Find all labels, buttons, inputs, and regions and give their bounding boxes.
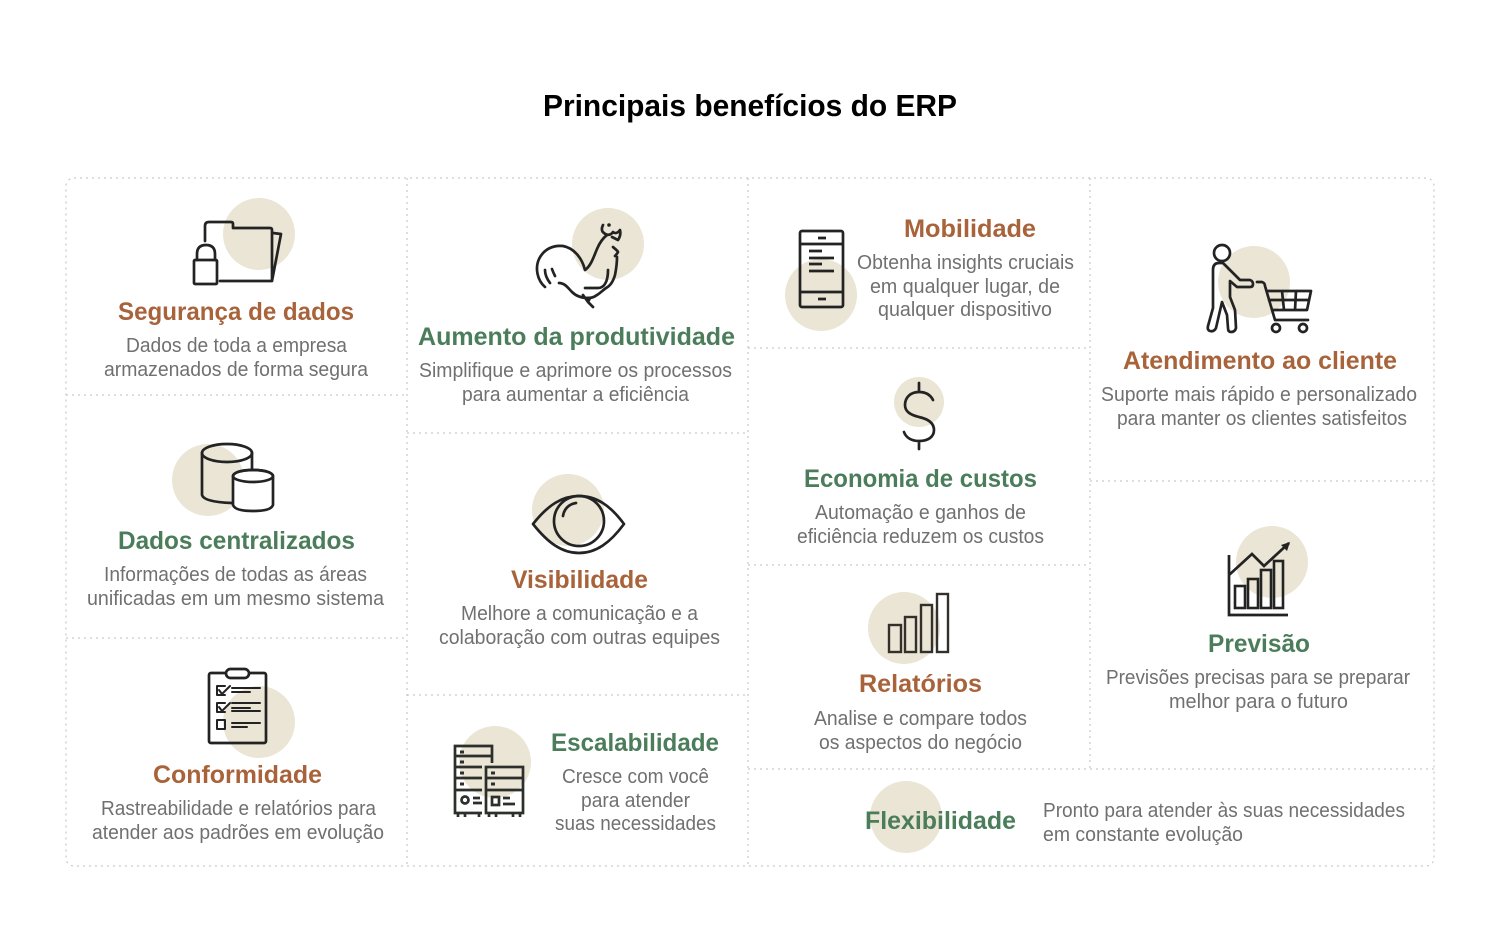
- description: [1106, 667, 1410, 713]
- description: [419, 360, 732, 406]
- description: [797, 502, 1044, 548]
- icon: dollar sign: [894, 377, 944, 449]
- description: Suporte mais rápido e personalizado: [1101, 384, 1417, 406]
- description: Simplifique e aprimore os processos: [419, 360, 732, 382]
- panel: Segurança de dados: [104, 198, 369, 381]
- heading: Visibilidade: [511, 566, 648, 594]
- description: [87, 564, 385, 610]
- icon: rooster: [537, 208, 644, 307]
- description: Pronto para atender às suas necessidades: [1043, 800, 1405, 822]
- heading: Conformidade: [153, 761, 322, 789]
- description: Previsões precisas para se preparar: [1106, 667, 1410, 689]
- description: [104, 335, 369, 381]
- description: Rastreabilidade e relatórios para: [101, 798, 377, 820]
- description: Automação e ganhos de: [815, 502, 1026, 524]
- description: Dados de toda a empresa: [126, 335, 348, 357]
- description: em qualquer lugar, de: [870, 276, 1060, 298]
- icon: beige circle: [870, 781, 942, 853]
- description: qualquer dispositivo: [878, 299, 1052, 321]
- description: Informações de todas as áreas: [104, 564, 367, 586]
- description: colaboração com outras equipes: [439, 627, 720, 649]
- description: para aumentar a eficiência: [462, 384, 690, 406]
- description: [1101, 384, 1417, 430]
- panel: Atendimento ao cliente: [1101, 245, 1417, 430]
- icon: database cylinders: [172, 444, 273, 516]
- heading: Previsão: [1208, 630, 1310, 658]
- heading: Aumento da produtividade: [418, 323, 735, 351]
- panel: Visibilidade: [439, 474, 720, 649]
- description: suas necessidades: [555, 813, 716, 835]
- description: atender aos padrões em evolução: [92, 822, 384, 844]
- panel: Escalabilidade: [455, 726, 719, 835]
- heading: Relatórios: [859, 670, 982, 698]
- description: melhor para o futuro: [1169, 691, 1348, 713]
- panel: Conformidade: [92, 669, 384, 844]
- panel: Previsão: [1106, 526, 1410, 713]
- heading: Segurança de dados: [118, 298, 354, 326]
- heading: Flexibilidade: [865, 807, 1016, 835]
- description: para manter os clientes satisfeitos: [1117, 408, 1407, 430]
- panel: Aumento da produtividade: [418, 208, 735, 406]
- description: unificadas em um mesmo sistema: [87, 588, 385, 610]
- description: em constante evolução: [1043, 824, 1243, 846]
- heading: Economia de custos: [804, 465, 1037, 493]
- description: [92, 798, 384, 844]
- description: [1043, 800, 1405, 846]
- icon: clipboard checklist: [209, 669, 295, 758]
- description: eficiência reduzem os custos: [797, 526, 1044, 548]
- description: Analise e compare todos: [814, 708, 1027, 730]
- panel: Flexibilidade: [865, 781, 1405, 853]
- icon: growth chart with arrow: [1229, 526, 1308, 615]
- icon: bar chart: [868, 592, 948, 664]
- panel: Dados centralizados: [87, 444, 385, 610]
- description: [439, 603, 720, 649]
- description: [814, 708, 1027, 754]
- heading: Escalabilidade: [551, 729, 719, 757]
- icon: eye: [532, 474, 624, 553]
- description: os aspectos do negócio: [819, 732, 1022, 754]
- heading: Dados centralizados: [118, 527, 355, 555]
- description: para atender: [581, 790, 690, 812]
- description: [857, 252, 1074, 321]
- heading: Mobilidade: [904, 215, 1036, 243]
- panel: Mobilidade: [785, 215, 1074, 331]
- description: Obtenha insights cruciais: [857, 252, 1074, 274]
- description: [555, 766, 716, 835]
- description: Cresce com você: [562, 766, 709, 788]
- icon: person with shopping cart: [1208, 245, 1311, 332]
- panel: Relatórios: [814, 592, 1027, 754]
- description: armazenados de forma segura: [104, 359, 369, 381]
- icon: servers: [455, 726, 531, 817]
- description: Melhore a comunicação e a: [461, 603, 699, 625]
- icon: folder and padlock: [194, 198, 295, 284]
- panel: Economia de custos: [797, 377, 1044, 548]
- icon: smartphone: [785, 231, 857, 331]
- title: Principais benefícios do ERP: [543, 88, 957, 123]
- heading: Atendimento ao cliente: [1123, 347, 1397, 375]
